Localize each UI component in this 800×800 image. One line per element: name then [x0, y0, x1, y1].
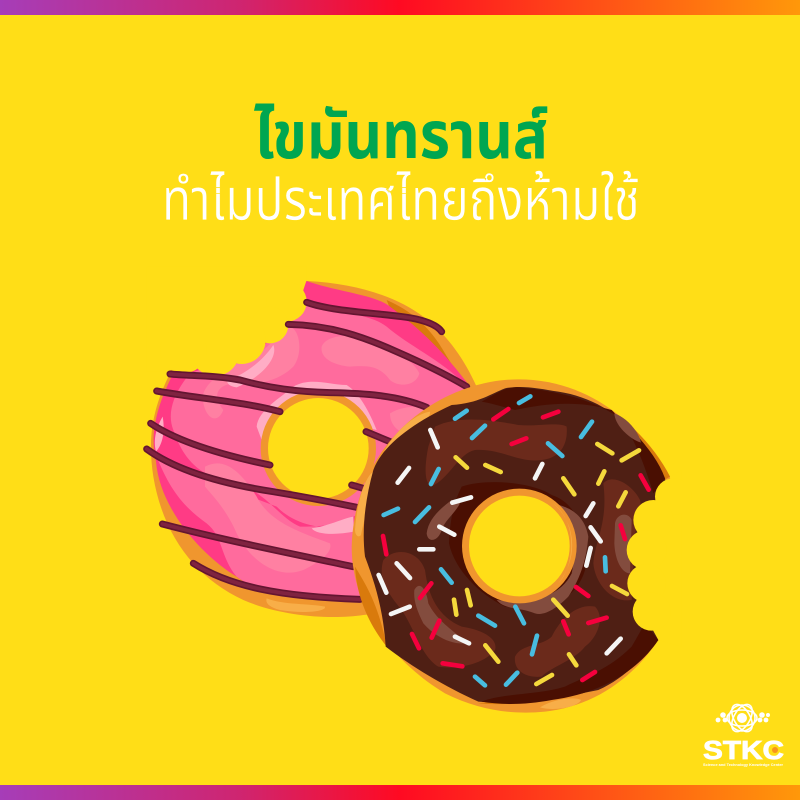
- logo wordmark: STKC: [703, 735, 784, 765]
- icon: atom: [727, 701, 757, 735]
- bottom gradient bar: [0, 785, 800, 800]
- pink glaze pale highlights: [257, 382, 377, 440]
- pink donut hole: [261, 391, 376, 506]
- bite marks on pink donut: [147, 267, 307, 376]
- pink donut: [147, 267, 483, 617]
- red sprinkles: [383, 409, 649, 680]
- pink donut dough: [151, 281, 483, 617]
- chocolate drizzle lines: [147, 302, 467, 599]
- yellow sprinkles: [454, 444, 639, 684]
- chocolate donut: [352, 379, 692, 713]
- pink glaze lighter swirls: [322, 336, 419, 385]
- chocolate glaze pale highlights: [497, 503, 588, 614]
- top gradient bar: [0, 0, 800, 15]
- logo: STKC: [703, 701, 784, 767]
- chocolate donut dough: [352, 379, 678, 713]
- subtitle: ทำไมประเทศไทยถึงห้ามใช้: [162, 167, 640, 233]
- logo tagline: Science and Technology Knowledge Center: [703, 762, 783, 767]
- chocolate glaze lighter swirls: [426, 420, 567, 486]
- logo side dots: [716, 712, 770, 722]
- chocolate glaze dark edges: [482, 387, 665, 493]
- bite marks on chocolate donut: [627, 470, 692, 647]
- blue sprinkles: [384, 396, 606, 685]
- pink glaze base: [154, 281, 483, 600]
- chocolate donut hole: [462, 489, 577, 603]
- chocolate glaze base: [364, 387, 678, 703]
- title: ไขมันทรานส์: [254, 98, 548, 172]
- logo orange dot: [772, 747, 778, 753]
- pink glaze mid layer: [157, 300, 483, 599]
- white sprinkles: [379, 430, 621, 653]
